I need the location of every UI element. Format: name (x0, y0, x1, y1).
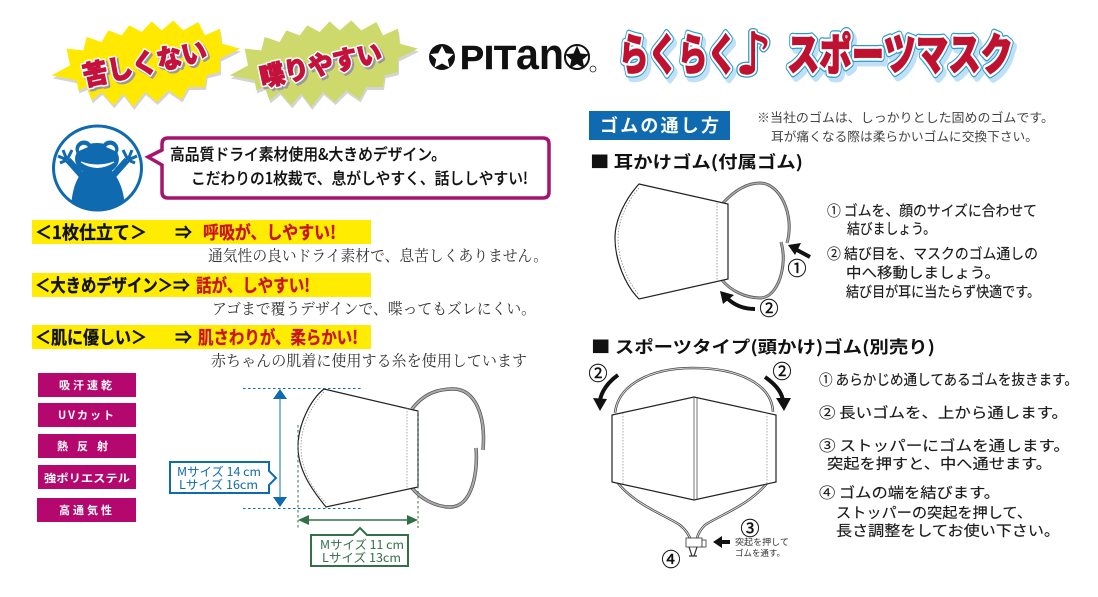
width callout: Lサイズ 13cm (322, 549, 401, 566)
brand logo: PITan: an (516, 30, 564, 79)
height callout: Lサイズ 16cm (179, 476, 258, 493)
width callout: Mサイズ 11 cm (320, 536, 404, 553)
ear-loop instructions: ② 結び目を、マスクのゴム通しの (827, 243, 1038, 264)
sports type instructions: ② 長いゴムを、上から通します。 (819, 402, 1068, 423)
title: らくらく♪ スポーツマスク: スポーツマスク (787, 19, 1013, 83)
feature row: 肌に優しい: 肌さわりが、柔らかい! (198, 324, 358, 350)
sports type instructions: 長さ調整をしてお使い下さい。 (836, 520, 1060, 541)
feature row: 大きめデザイン: アゴまで覆うデザインで、喋ってもズレにくい。 (212, 297, 536, 319)
title: らくらく♪ スポーツマスク: らくらく (619, 19, 737, 83)
section label: ゴムの通し方: ゴムの通し方 (600, 112, 719, 138)
burst badge: 喋りやすい: 喋りやすい (256, 33, 385, 95)
feature row: 1枚仕立て (32, 219, 548, 266)
feature row: 肌に優しい (32, 324, 527, 371)
brand logo: PITan (429, 30, 596, 79)
ear-loop instructions: 結び目が耳に当たらず快適です。 (846, 281, 1040, 302)
title: らくらく♪ スポーツマスク: スポーツマスク (787, 19, 1013, 83)
height arrow (273, 389, 287, 507)
burst badge: 苦しくない: 苦しくない (79, 29, 210, 94)
arrow right (765, 357, 792, 411)
sports type instructions (819, 369, 1078, 541)
title: らくらく♪ スポーツマスク: スポーツマスク (787, 19, 1013, 83)
feature row: 大きめデザイン: 話が、しやすい! (196, 272, 310, 298)
icon: frog in circle (54, 126, 142, 212)
title: らくらく♪ スポーツマスク: らくらく (622, 23, 740, 87)
feature row: 大きめデザイン: ⇒ (173, 272, 190, 298)
arrow to stopper (661, 514, 789, 572)
diagram: sports type mask (588, 357, 792, 572)
width callout (311, 528, 408, 566)
feature row: 1枚仕立て: 呼吸が、しやすい! (203, 219, 336, 245)
ear-loop instructions (827, 200, 1040, 302)
note text (757, 107, 1054, 145)
arrow 1 (787, 243, 810, 281)
speech bubble: 高品質ドライ素材使用&大きめデザイン。 (170, 141, 446, 165)
speech bubble (148, 138, 549, 198)
burst badge: 苦しくない (52, 20, 241, 110)
note text: 耳が痛くなる際は柔らかいゴムに交換下さい。 (771, 126, 1038, 145)
ear-loop instructions: 中へ移動しましょう。 (846, 262, 1000, 283)
title: らくらく♪ スポーツマスク (619, 19, 1016, 88)
title: らくらく♪ スポーツマスク: らくらく (619, 19, 737, 83)
feature badges: 吸汗速乾 (59, 377, 115, 393)
size diagram: mask with dimensions (170, 388, 483, 566)
arrow 1: ① (787, 254, 807, 281)
burst badge: 苦しくない: 苦しくない (81, 31, 212, 96)
height callout (170, 462, 276, 493)
feature row: 1枚仕立て: 通気性の良いドライ素材で、息苦しくありません。 (208, 244, 548, 266)
burst badge: 苦しくない: 苦しくない (79, 29, 210, 94)
burst badge: 喋りやすい: 喋りやすい (256, 33, 385, 95)
sports type instructions: 突起を押すと、中へ通せます。 (827, 453, 1052, 474)
feature row: 大きめデザイン (32, 272, 536, 319)
sports type instructions: ストッパーの突起を押して、 (836, 502, 1032, 523)
arrow left: ② (588, 359, 608, 386)
title: らくらく♪ スポーツマスク: スポーツマスク (790, 23, 1016, 87)
title: らくらく♪ スポーツマスク: ♪ (735, 20, 772, 88)
arrow to stopper: ゴムを通す。 (735, 547, 785, 559)
height callout: Mサイズ 14 cm (177, 463, 261, 480)
feature row: 肌に優しい: ＜肌に優しい＞ (35, 324, 147, 350)
arrow left (588, 359, 618, 411)
burst badge: 喋りやすい (230, 20, 419, 110)
feature badges: 熱反射 (57, 438, 117, 454)
feature row: 肌に優しい: 赤ちゃんの肌着に使用する糸を使用しています (211, 349, 527, 371)
arrow to stopper: 突起を押して (735, 536, 789, 548)
feature row: 肌に優しい: ⇒ (175, 324, 192, 350)
feature badges (37, 373, 136, 522)
arrow right: ② (772, 357, 792, 384)
speech bubble: こだわりの1枚裁で、息がしやすく、話ししやすい! (191, 165, 528, 189)
arrow 2 (720, 291, 779, 321)
burst badge: 喋りやすい: 喋りやすい (258, 35, 387, 97)
note text: ※当社のゴムは、しっかりとした固めのゴムです。 (757, 107, 1054, 126)
stopper (686, 538, 706, 556)
title: らくらく♪ スポーツマスク: ♪ (735, 20, 772, 88)
sports type instructions: ③ ストッパーにゴムを通します。 (819, 435, 1070, 456)
heading: 耳かけゴム: ■ 耳かけゴム(付属ゴム) (590, 148, 803, 173)
diagram: ear-loop mask (615, 183, 810, 321)
feature badges: 強ポリエステル (44, 470, 130, 486)
feature badges: 高通気性 (59, 502, 115, 518)
ear-loop instructions: 結びましょう。 (847, 218, 936, 239)
feature row: 1枚仕立て: ＜1枚仕立て＞ (35, 219, 147, 245)
arrow 2: ② (759, 294, 779, 321)
arrow to stopper: ③ (740, 514, 760, 541)
feature badges: UVカット (58, 407, 116, 423)
brand logo: PITan: PIT (460, 39, 516, 76)
title: らくらく♪ スポーツマスク: ♪ (735, 20, 772, 88)
heading: スポーツタイプ: ■ スポーツタイプ(頭かけ)ゴム(別売り) (591, 333, 935, 358)
width arrow (298, 515, 418, 525)
feature row: 大きめデザイン: ＜大きめデザイン＞ (35, 272, 173, 298)
sports type instructions: ① あらかじめ通してあるゴムを抜きます。 (819, 369, 1078, 390)
sports type instructions: ④ ゴムの端を結びます。 (819, 482, 1000, 503)
ear-loop instructions: ① ゴムを、顔のサイズに合わせて (827, 200, 1037, 221)
feature row: 1枚仕立て: ⇒ (175, 219, 192, 245)
title: らくらく♪ スポーツマスク: らくらく (619, 19, 737, 83)
arrow to stopper: ④ (661, 545, 681, 572)
